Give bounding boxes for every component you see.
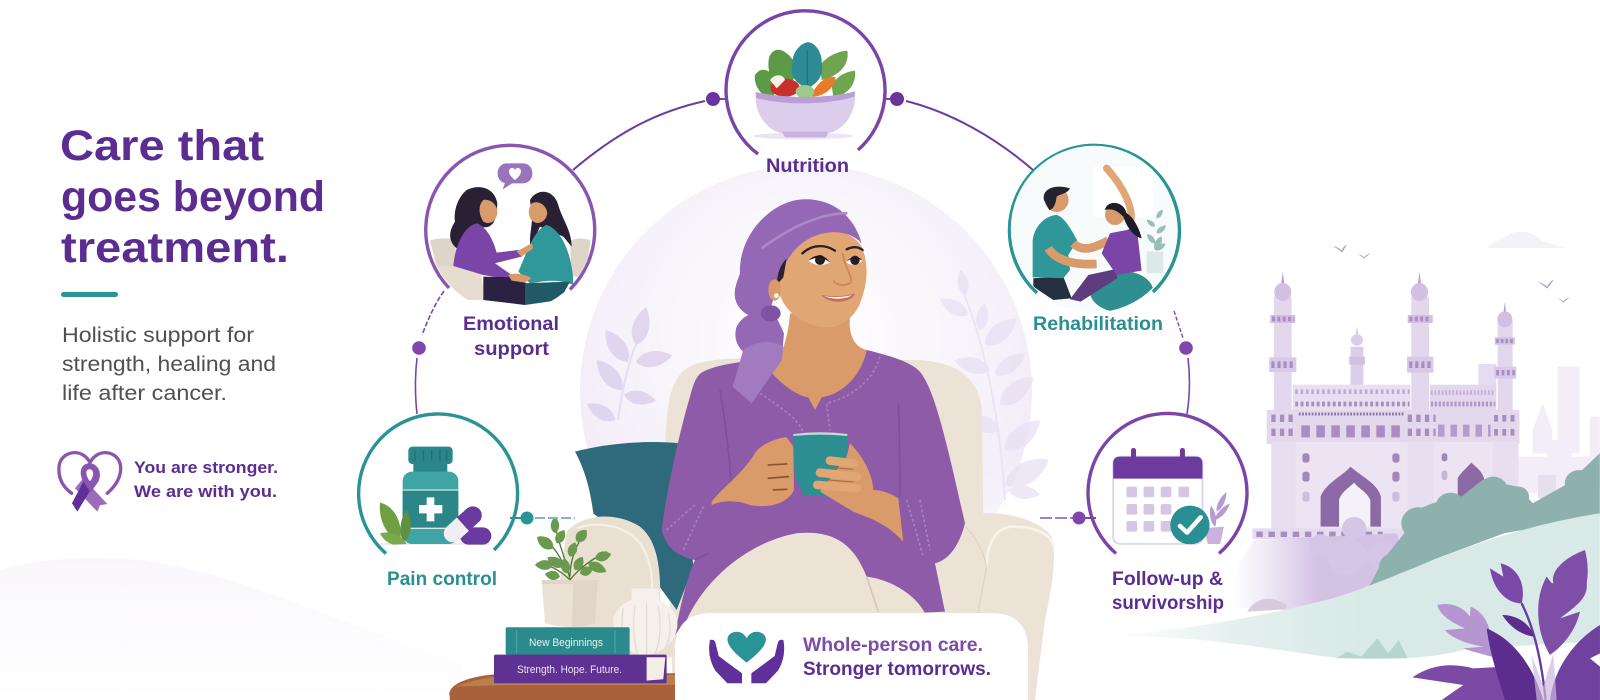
callout text: Stronger tomorrows.	[803, 659, 991, 680]
gate facade	[1271, 442, 1518, 531]
faded purple trees	[1226, 533, 1411, 610]
callout: whole-person care	[675, 613, 1028, 700]
connector dots	[412, 92, 1193, 524]
armchair back and right arm	[665, 358, 1054, 700]
mint hill	[1094, 513, 1600, 659]
kurta	[662, 350, 965, 635]
label: Rehabilitation: Rehabilitation	[1033, 314, 1163, 335]
book title: Strength. Hope. Future.: Strength. Hope. Future.	[517, 664, 622, 676]
big purple plant	[1412, 550, 1600, 700]
book title: New Beginnings: New Beginnings	[529, 637, 603, 649]
label: Pain control: Pain control	[387, 569, 497, 590]
icon: speech bubble with heart	[498, 163, 532, 189]
smile	[821, 293, 855, 302]
care circle: emotional support	[426, 145, 595, 305]
left minaret	[1269, 272, 1296, 413]
skyline behind Charminar	[1518, 367, 1600, 498]
Charminar monument	[1252, 272, 1519, 539]
title: treatment.	[61, 224, 289, 272]
scarf	[733, 199, 862, 403]
title	[60, 122, 325, 272]
kurta shading	[695, 390, 900, 560]
centre minaret	[1407, 272, 1433, 410]
neck and chest	[772, 313, 867, 410]
rear right tower block	[1478, 364, 1496, 394]
subheading text	[62, 324, 276, 405]
callout text	[803, 635, 991, 680]
care circle: pain control	[359, 414, 518, 554]
icon: calendar with check badge	[1113, 448, 1232, 544]
illustration: two women talking on a sofa	[430, 187, 591, 305]
label: Emotional support: support	[474, 339, 550, 360]
terrace balustrade	[1252, 528, 1404, 539]
brows	[802, 246, 863, 253]
pants	[687, 533, 925, 623]
label: Follow-up & survivorship: survivorship	[1112, 593, 1224, 614]
mug	[793, 432, 847, 497]
hair edge	[777, 258, 787, 285]
balustrade storeys	[1293, 385, 1411, 410]
right minaret	[1494, 302, 1516, 413]
care circle: nutrition	[726, 11, 885, 154]
label: Nutrition: Nutrition	[766, 156, 849, 177]
lavender leaves, right of the halo	[937, 269, 1054, 501]
background wave: bottom left	[0, 558, 470, 700]
left forearm and hand	[712, 437, 794, 506]
face	[778, 232, 867, 327]
green-grey trees	[1368, 453, 1600, 588]
small rear minaret	[1349, 326, 1365, 387]
woman in purple kurta with headscarf	[662, 199, 965, 635]
icon: heart with awareness ribbon	[59, 453, 121, 512]
upper arcade	[1267, 410, 1519, 444]
halo disc behind the woman	[570, 165, 1042, 645]
label: Emotional support: Emotional	[463, 314, 559, 335]
tagline text: We are with you.	[134, 482, 277, 501]
side niches	[1302, 453, 1447, 502]
tagline text: You are stronger.	[134, 458, 278, 477]
cloud	[1487, 232, 1566, 248]
birds	[1333, 245, 1570, 303]
label: Follow-up & survivorship	[1112, 569, 1224, 614]
callout text: Whole-person care.	[803, 635, 983, 656]
tree crowns near gate	[1309, 517, 1398, 575]
title: Care that	[60, 122, 264, 170]
care circle: follow-up and survivorship	[1088, 413, 1247, 554]
teal accent bar	[61, 292, 118, 297]
icon: salad bowl	[753, 42, 855, 139]
connector lines between the care circles	[416, 99, 1189, 518]
potted plant	[534, 516, 613, 627]
eyes	[808, 256, 863, 265]
kurta embroidery	[667, 357, 930, 557]
title: goes beyond	[61, 173, 325, 221]
right hand	[817, 443, 903, 542]
ear	[768, 279, 781, 301]
books	[494, 627, 667, 683]
label: Emotional support	[463, 314, 559, 360]
tagline text	[134, 458, 278, 501]
vase	[613, 588, 677, 655]
nose	[833, 253, 851, 285]
main gate arch	[1321, 467, 1381, 527]
teal pillow	[575, 442, 693, 610]
earring	[774, 293, 779, 298]
care circle: rehabilitation	[1009, 145, 1179, 312]
side gate arch	[1458, 463, 1484, 503]
subheading text: strength, healing and	[62, 353, 276, 376]
armchair left arm	[557, 517, 677, 663]
lavender leaves, left of the halo	[584, 305, 674, 426]
illustration: physiotherapist with patient	[1011, 146, 1177, 312]
small grass tufts	[1247, 599, 1408, 658]
subheading text: Holistic support for	[62, 324, 254, 347]
icon: hands holding heart	[709, 632, 784, 683]
icon: medicine bottle with capsules and leaves	[380, 447, 491, 546]
left hand finger lines	[768, 464, 788, 490]
subheading text: life after cancer.	[62, 382, 227, 405]
round side table	[449, 673, 677, 700]
label: Follow-up & survivorship: Follow-up &	[1112, 569, 1223, 590]
